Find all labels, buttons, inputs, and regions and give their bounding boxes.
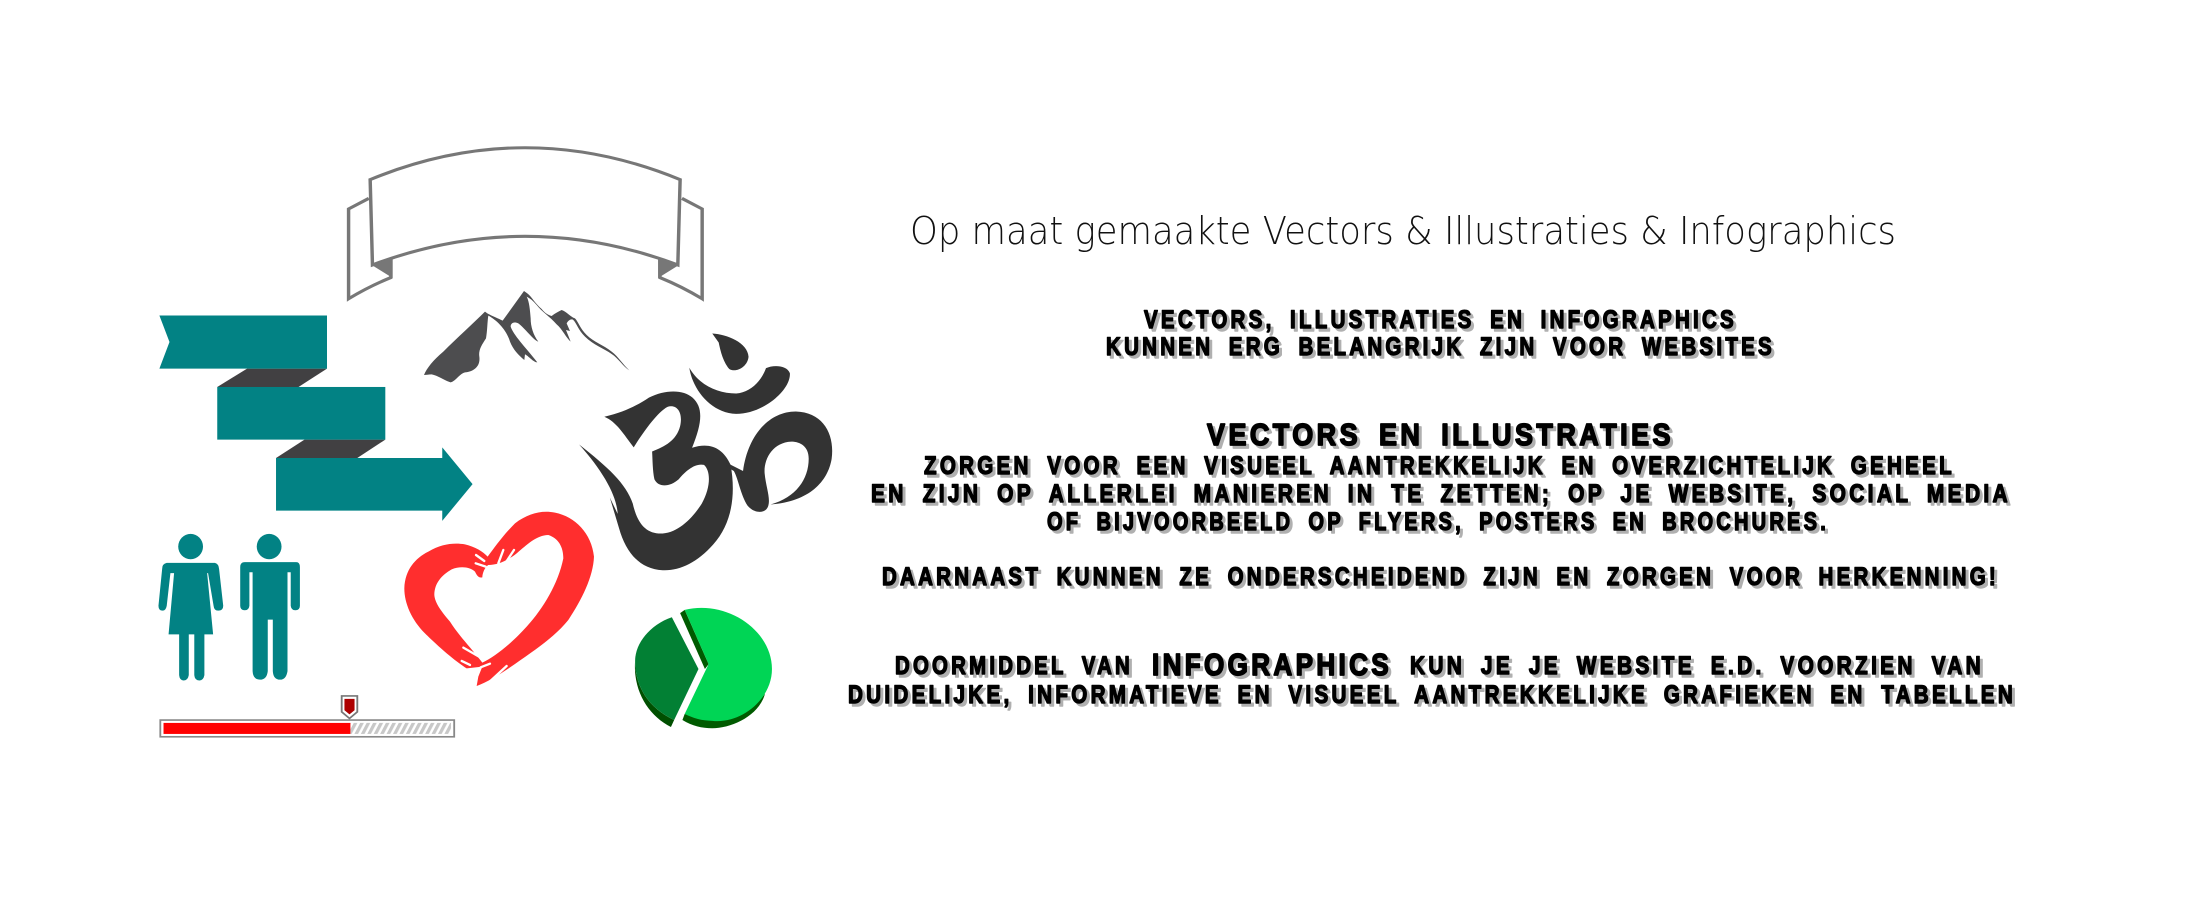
icon: mountain xyxy=(424,291,629,382)
title: Op maat gemaakte Vectors & Illustraties & Infographics xyxy=(910,209,1896,253)
text block: infographics description: DOORMIDDEL VAN xyxy=(895,652,1133,680)
text block: intro: VECTORS, ILLUSTRATIES EN INFOGRAPHICS xyxy=(1144,306,1737,334)
text block: intro xyxy=(1106,306,1775,361)
icon: woman pictogram xyxy=(158,534,223,680)
text block: vectors description: OF BIJVOORBEELD OP FLYERS, POSTERS EN BROCHURES. xyxy=(1047,508,1829,536)
icon: om symbol xyxy=(579,333,832,570)
icon: man pictogram xyxy=(240,534,300,680)
text block: infographics description: KUN JE JE WEBSITE E.D. VOORZIEN VAN xyxy=(1410,652,1984,680)
icon: teal zigzag ribbon arrow xyxy=(159,316,473,521)
text block: vectors description: EN ZIJN OP ALLERLEI MANIEREN IN TE ZETTEN; OP JE WEBSITE, SOCIAL MEDIA xyxy=(871,480,2011,508)
text block: intro: KUNNEN ERG BELANGRIJK ZIJN VOOR WEBSITES xyxy=(1106,333,1775,361)
icon: empty scroll banner xyxy=(349,148,702,299)
heading: vectors en illustraties: VECTORS EN ILLUSTRATIES xyxy=(1207,417,1674,452)
text block: vectors description: ZORGEN VOOR EEN VISUEEL AANTREKKELIJK EN OVERZICHTELIJK GEHEEL xyxy=(924,452,1955,480)
text block: infographics description: INFOGRAPHICS xyxy=(1152,647,1392,682)
text block: vectors description xyxy=(871,452,2011,536)
progress bar with marker xyxy=(160,696,454,737)
chart: green 3D pie xyxy=(635,608,772,728)
illustrations panel xyxy=(158,148,832,737)
icon: red heart of hands xyxy=(404,512,594,686)
text block: infographics description xyxy=(848,647,2016,709)
